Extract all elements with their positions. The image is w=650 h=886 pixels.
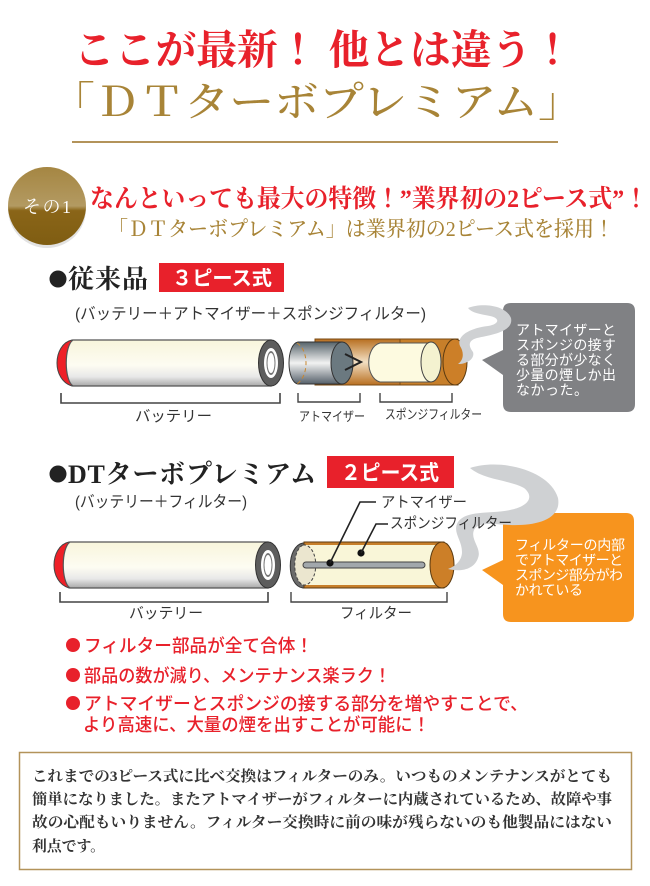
diagram: integrated filter: フィルター [340,605,412,622]
heading: conventional 3-piece: ３ピース式 [172,267,272,290]
callout: gray [482,303,635,412]
callout: orange: でアトマイザーと [515,552,623,568]
callout: gray: アトマイザーと [516,322,616,338]
diagram: integrated filter [290,502,454,622]
text: 3-piece composition: (バッテリー＋アトマイザー＋スポンジフィルター) [75,305,426,323]
heading: DT Turbo Premium 2-piece: DTターボプレミアム [68,460,316,489]
callout: gray: スポンジの接す [516,337,616,353]
labels: atomizer and sponge filter [381,494,512,532]
heading: DT Turbo Premium 2-piece: ２ピース式 [341,462,439,485]
diagram: sponge filter: スポンジフィルター [385,407,482,422]
text box: summary: 利点です。 [32,837,105,855]
callout: gray: なかった。 [516,382,588,398]
labels: atomizer and sponge filter: アトマイザー [381,494,467,511]
title: headline: 「ＤＴターボプレミアム」 [50,79,583,125]
diagram: sponge filter [369,339,482,422]
callout: gray: る部分が少なく [516,352,616,368]
diagram: conventional battery [57,340,284,425]
title: headline: ここが最新！ 他とは違う！ [74,27,573,73]
callout: gray: 少量の煙しか出 [516,367,616,383]
title: headline [50,27,583,143]
diagram: new battery: バッテリー [129,605,203,622]
smoke: conventional [458,305,511,364]
badge: その1 [8,167,86,248]
bullet list: フィルター部品が全て合体！ [84,635,313,656]
bullet list: 部品の数が減り、メンテナンス楽ラク！ [84,665,391,686]
callout: orange: スポンジ部分がわ [515,567,623,583]
heading: DT Turbo Premium 2-piece [50,456,454,489]
text: 2-piece composition: (バッテリー＋フィルター) [75,493,247,511]
section heading [90,185,648,241]
diagram: new battery [54,542,280,622]
callout: orange [482,513,634,622]
text box: summary: 簡単になりました。またアトマイザーがフィルターに内蔵されているため、故障や事 [32,790,612,808]
bullet list [66,635,528,735]
text box: summary: 故の心配もいりません。フィルター交換時に前の味が残らないのも他製品にはない [32,813,612,831]
heading: conventional 3-piece: 従来品 [68,265,148,294]
callout: orange: かれている [515,582,583,598]
diagram: atomizer [289,339,415,424]
diagram: conventional battery: バッテリー [135,408,212,425]
bullet list: より高速に、大量の煙を出すことが可能に！ [83,714,430,735]
text box: summary: これまでの3ピース式に比べ交換はフィルターのみ。いつものメンテナンスがとても [32,767,612,785]
labels: atomizer and sponge filter: スポンジフィルター [390,515,512,532]
callout: orange: フィルターの内部 [515,537,625,553]
bullet list: アトマイザーとスポンジの接する部分を増やすことで、 [84,694,528,714]
section heading: 「ＤＴターボプレミアム」は業界初の2ピース式を採用！ [108,217,614,241]
text box: summary [20,752,632,870]
diagram: atomizer: アトマイザー [299,409,365,424]
badge: その1: その1 [23,197,71,217]
heading: conventional 3-piece [50,263,284,294]
smoke: new filter [448,465,558,570]
